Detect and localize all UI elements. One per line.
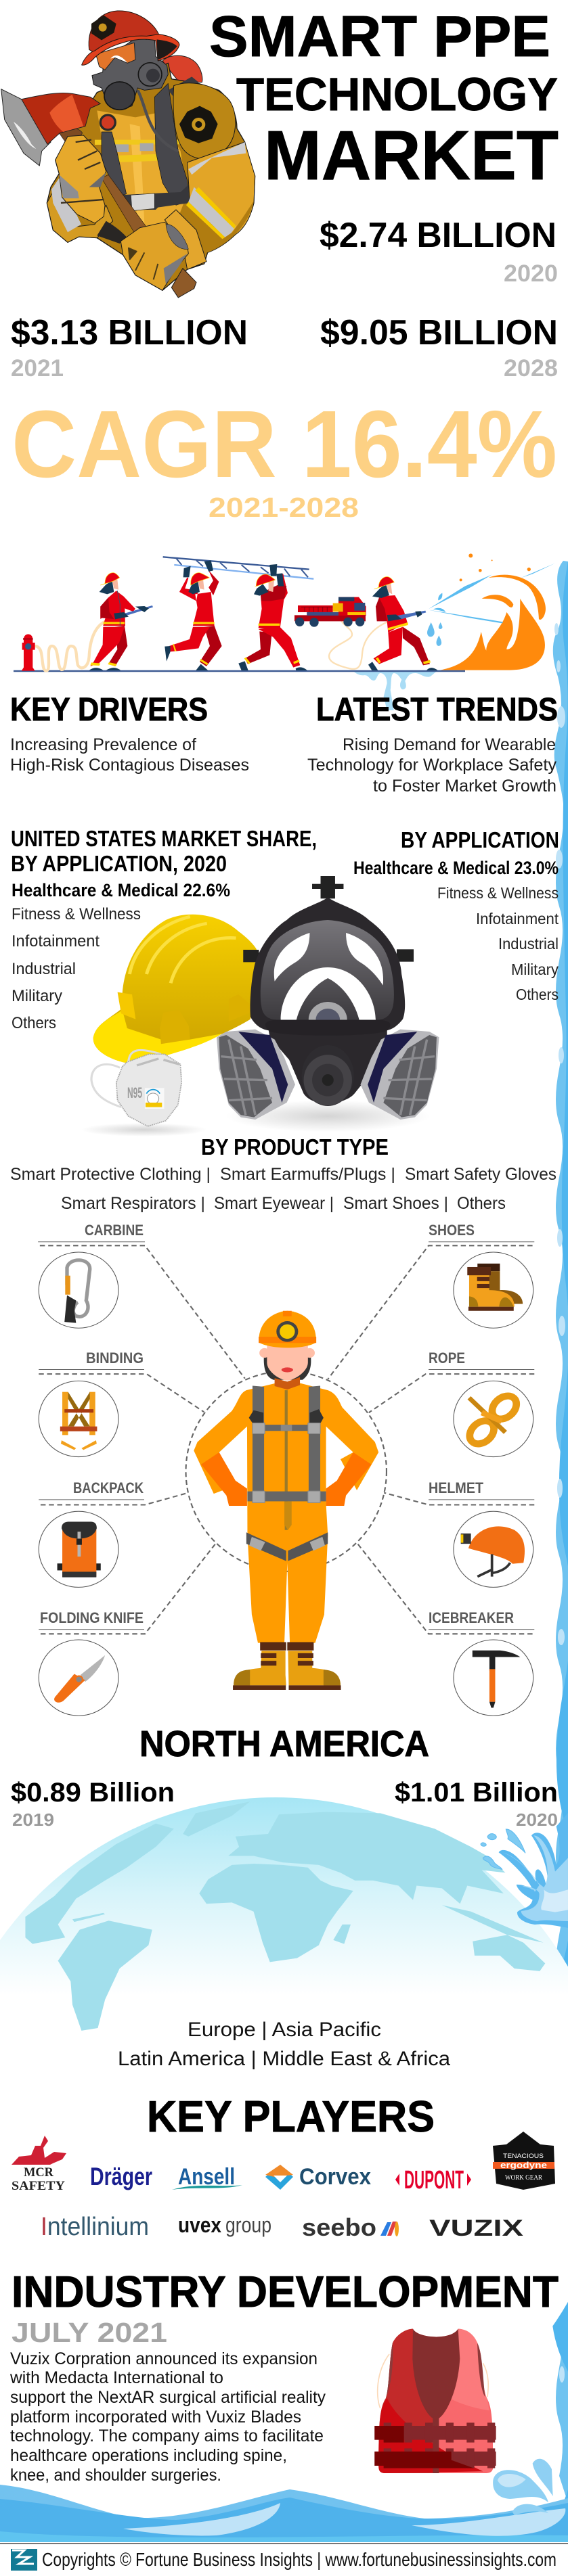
by product type: BY PRODUCT TYPE	[201, 1134, 389, 1159]
logo: MCR Safety: MCR	[24, 2165, 53, 2180]
callout: rope	[429, 1350, 534, 1457]
heading: key drivers: High-Risk Contagious Diseases	[10, 756, 249, 775]
logo: Ergodyne: WORK GEAR	[505, 2174, 542, 2182]
CAGR callout: 2021-2028	[209, 492, 359, 523]
by product type: Smart Shoes |	[343, 1194, 448, 1213]
by product type: Smart Safety Gloves	[405, 1165, 556, 1184]
United States market share: Healthcare & Medical 22.6%	[12, 880, 230, 900]
logo: Vuzix: VUZIX	[429, 2215, 523, 2241]
callout: icebreaker: ICEBREAKER	[429, 1609, 514, 1626]
other regions list: Latin America | Middle East & Africa	[118, 2048, 450, 2070]
logo: uvex group: group	[225, 2213, 271, 2237]
illustration: helmet, respirator mask and N95	[81, 876, 439, 1136]
regional value: 2019: 2019	[12, 1810, 54, 1830]
callout: backpack: BACKPACK	[73, 1479, 144, 1496]
United States market share	[11, 826, 317, 1032]
regional value: 2020: 2020	[516, 1810, 558, 1830]
by application: Others	[516, 986, 559, 1003]
callout: carbine: CARBINE	[85, 1222, 144, 1239]
worker figure in orange suit	[194, 1311, 378, 1690]
heading: north america: NORTH AMERICA	[139, 1724, 429, 1764]
callout: binding	[39, 1350, 144, 1457]
yellow hard hat	[93, 915, 257, 1063]
logo: Ergodyne: TENACIOUS	[503, 2153, 544, 2159]
by application	[353, 827, 559, 1003]
by product type	[10, 1134, 556, 1213]
United States market share: Infotainment	[12, 932, 100, 950]
bottom water wave	[0, 2459, 568, 2542]
figure 2	[165, 560, 222, 670]
heading: key players: KEY PLAYERS	[147, 2092, 435, 2141]
logo: Corvex	[265, 2164, 371, 2190]
heading: latest trends: Technology for Workplace Safety	[307, 756, 556, 775]
regional value: 2019: $0.89 Billion	[11, 1778, 175, 1808]
stat: 2020 value	[320, 216, 558, 287]
heading: key drivers	[10, 692, 249, 775]
stat: 2028 value: $9.05 BILLION	[320, 313, 558, 352]
title: SMART PPE	[209, 5, 550, 69]
by product type: Smart Eyewear |	[214, 1194, 334, 1213]
dashed connector lines	[39, 1245, 534, 1634]
droplets	[493, 2459, 553, 2515]
logo: DuPont: DUPONT	[404, 2166, 464, 2194]
logo: MCR Safety: SAFETY	[12, 2179, 65, 2193]
by product type: Smart Respirators |	[61, 1194, 205, 1213]
callout: shoes	[429, 1222, 534, 1328]
development body text: knee, and shoulder surgeries.	[10, 2466, 221, 2485]
other regions list: Europe | Asia Pacific	[188, 2019, 381, 2041]
heading: latest trends: to Foster Market Growth	[373, 777, 556, 796]
ground line	[14, 670, 465, 672]
callout: helmet: HELMET	[429, 1479, 483, 1496]
heading: key drivers: KEY DRIVERS	[10, 692, 208, 728]
heading: industry development: INDUSTRY DEVELOPMENT	[12, 2267, 559, 2316]
development body text: Vuzix Corpration announced its expansion	[10, 2349, 318, 2368]
callout: rope: ROPE	[429, 1350, 465, 1366]
by application: Infotainment	[476, 910, 559, 927]
fire truck and figure four	[294, 577, 438, 670]
by product type: Others	[457, 1194, 506, 1213]
title	[209, 5, 559, 194]
N95 mask label: N95	[127, 1084, 142, 1101]
heading: latest trends	[307, 692, 558, 796]
logo: Corvex: Corvex	[299, 2164, 371, 2190]
by product type: Smart Protective Clothing |	[10, 1165, 211, 1184]
title: MARKET	[264, 116, 559, 194]
logo: MCR Safety	[12, 2136, 66, 2193]
figure 1	[89, 573, 153, 670]
stat: 2021 value: 2021	[11, 355, 64, 382]
water splash	[481, 1813, 568, 1928]
stat: 2021 value: $3.13 BILLION	[11, 313, 248, 352]
other regions list	[118, 2019, 450, 2070]
United States market share: BY APPLICATION, 2020	[11, 851, 227, 876]
callout: shoes: SHOES	[429, 1222, 475, 1239]
left filter	[217, 1030, 295, 1120]
logo: Ergodyne: ergodyne	[500, 2160, 547, 2170]
by application: Industrial	[498, 935, 559, 952]
logo: DuPont	[395, 2166, 471, 2194]
figure 3	[238, 564, 307, 670]
heading: key drivers: Increasing Prevalence of	[10, 735, 196, 754]
logo: Intellinium: Intellinium	[41, 2213, 149, 2241]
callout: helmet	[429, 1479, 534, 1587]
date: JULY 2021	[12, 2317, 167, 2348]
right filter	[360, 1030, 439, 1120]
callout: carbine	[38, 1222, 145, 1328]
logo: uvex group	[178, 2213, 271, 2237]
by application: Military	[511, 961, 559, 978]
firefighters one to three and ladder	[22, 557, 313, 671]
icon: life vest	[374, 2329, 496, 2473]
development body text: healthcare operations including spine,	[10, 2446, 287, 2465]
illustration: firefighters with ladder, truck and fire	[14, 553, 555, 710]
logo: Seebo: seebo	[302, 2213, 376, 2241]
water puddle, fire and jets	[329, 553, 555, 710]
heading: latest trends: Rising Demand for Wearable	[343, 735, 556, 754]
regional value: 2019	[11, 1778, 175, 1830]
callout: icebreaker	[429, 1609, 534, 1716]
United States market share: Fitness & Wellness	[12, 905, 141, 923]
development body text: platform incorporated with Vuxiz Blades	[10, 2408, 301, 2426]
gas mask	[321, 876, 335, 898]
United States market share: Military	[12, 987, 62, 1005]
stat: 2021 value	[11, 313, 248, 382]
logo: Draeger: Dräger	[90, 2163, 152, 2190]
development body text: support the NextAR surgical artificial reality	[10, 2388, 326, 2407]
United States market share: Others	[12, 1014, 56, 1032]
United States market share: UNITED STATES MARKET SHARE,	[11, 826, 317, 851]
icon: firefighter with axe	[1, 11, 255, 298]
title: TECHNOLOGY	[236, 68, 558, 120]
stat: 2020 value: 2020	[504, 260, 558, 287]
United States market share: Industrial	[12, 960, 76, 978]
globe map	[0, 1797, 568, 2471]
logo: Ergodyne	[493, 2132, 555, 2190]
development body text: technology. The company aims to facilitate	[10, 2426, 324, 2445]
development body text	[9, 2349, 326, 2485]
stat: 2028 value: 2028	[504, 355, 558, 382]
callout: backpack	[39, 1479, 144, 1587]
regional value: 2020	[395, 1778, 558, 1830]
water stream along right edge	[551, 561, 568, 2503]
callout: binding: BINDING	[86, 1350, 144, 1366]
logo: uvex group: uvex	[178, 2213, 221, 2237]
regional value: 2020: $1.01 Billion	[395, 1778, 558, 1808]
stat: 2028 value	[320, 313, 558, 382]
stat: 2020 value: $2.74 BILLION	[320, 216, 556, 255]
by product type: Smart Earmuffs/Plugs |	[220, 1165, 395, 1184]
callout: folding knife	[39, 1609, 144, 1716]
callout: folding knife: FOLDING KNIFE	[40, 1609, 144, 1626]
by application: Fitness & Wellness	[437, 884, 559, 902]
N95 respirator	[91, 1050, 161, 1107]
development body text: with Medacta International to	[9, 2368, 223, 2387]
logo: Ansell: Ansell	[178, 2164, 235, 2190]
